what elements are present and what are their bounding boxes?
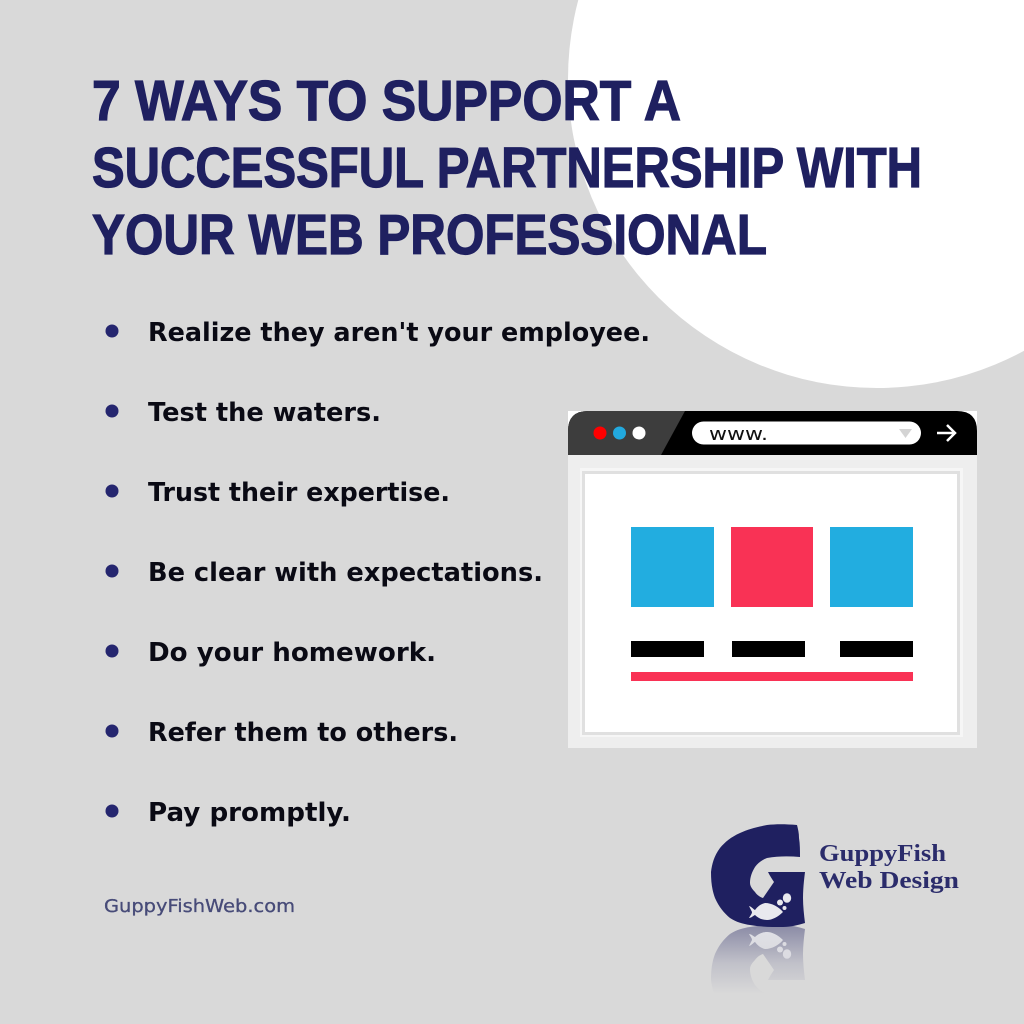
- content block: red centre: [731, 527, 813, 607]
- red rule: [631, 672, 913, 681]
- logo wordmark: [819, 841, 959, 894]
- black text bars: [631, 641, 913, 657]
- logo wordmark: GuppyFish: [819, 841, 946, 867]
- logo reflection: [711, 925, 805, 1024]
- content block: blue left: [631, 527, 714, 607]
- GuppyFish logo: [711, 824, 959, 1024]
- website URL: GuppyFishWeb.com: [104, 896, 295, 917]
- list item 2: Test the waters.: [148, 398, 381, 428]
- content block: blue right: [830, 527, 913, 607]
- browser window illustration: [568, 411, 977, 748]
- browser toolbar: www.: [709, 424, 768, 445]
- list item 5: Do your homework.: [148, 638, 436, 668]
- list item 3: Trust their expertise.: [148, 478, 450, 508]
- icon: fish and bubbles: [749, 893, 791, 920]
- title: YOUR WEB PROFESSIONAL: [92, 203, 767, 267]
- bullet list: [106, 318, 650, 828]
- icon: letter G: [711, 824, 805, 927]
- browser page frame: [580, 468, 963, 737]
- list item 6: Refer them to others.: [148, 718, 458, 748]
- title: 7 WAYS TO SUPPORT A: [92, 69, 681, 133]
- title: [92, 69, 922, 267]
- decorative white circle: [568, 0, 1024, 388]
- list item 1: Realize they aren't your employee.: [148, 318, 650, 348]
- browser toolbar: [568, 411, 977, 455]
- list item 4: Be clear with expectations.: [148, 558, 543, 588]
- list item 7: Pay promptly.: [148, 798, 351, 828]
- logo wordmark: Web Design: [819, 868, 959, 894]
